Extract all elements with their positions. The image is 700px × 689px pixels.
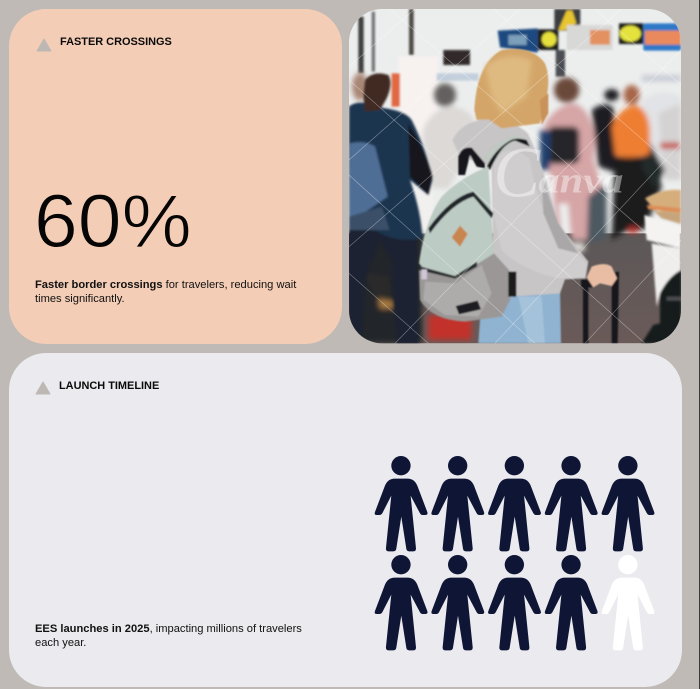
icon: triangle — [36, 38, 52, 52]
watermark: Canva: C — [493, 133, 541, 213]
text: EES launches in 2025: each year. — [35, 637, 86, 649]
watermark: Canva: anva — [538, 161, 623, 202]
person 5 — [602, 456, 654, 551]
text: EES launches in 2025: EES launches in 2025, impacting millions of travelers — [35, 623, 302, 635]
person 6 — [375, 555, 428, 650]
panel: launch timeline — [9, 353, 682, 687]
backpack — [458, 147, 485, 175]
heading: launch timeline: LAUNCH TIMELINE — [59, 380, 159, 392]
right edge line — [699, 0, 700, 689]
person 4 — [545, 456, 598, 551]
text: faster border crossings: times significantly. — [35, 293, 125, 305]
person 3 — [488, 456, 541, 551]
watermark lines — [349, 9, 681, 343]
main traveler — [419, 49, 619, 343]
person 8 — [488, 555, 541, 650]
person 2 — [431, 456, 484, 551]
suitcase handle — [580, 279, 592, 344]
icon: triangle — [36, 382, 50, 394]
person 9 — [545, 555, 598, 650]
panel: faster crossings — [9, 9, 342, 344]
right cart and boxes — [642, 190, 681, 343]
heading: faster crossings: FASTER CROSSINGS — [60, 36, 172, 48]
text: faster border crossings: Faster border crossings for travelers, reducing wait — [35, 279, 296, 291]
person 10: white — [602, 555, 654, 650]
person 7 — [431, 555, 484, 650]
background crowd — [349, 73, 681, 343]
foreground left person — [349, 73, 432, 343]
big number: 60%: 60% — [34, 179, 192, 263]
watermark: Canva — [497, 148, 622, 197]
person 1 — [375, 456, 428, 551]
text: EES launches in 2025 — [35, 623, 302, 649]
text: faster border crossings — [35, 279, 296, 305]
photo: traveler with backpack in airport queue — [349, 9, 681, 344]
floor — [349, 233, 681, 343]
